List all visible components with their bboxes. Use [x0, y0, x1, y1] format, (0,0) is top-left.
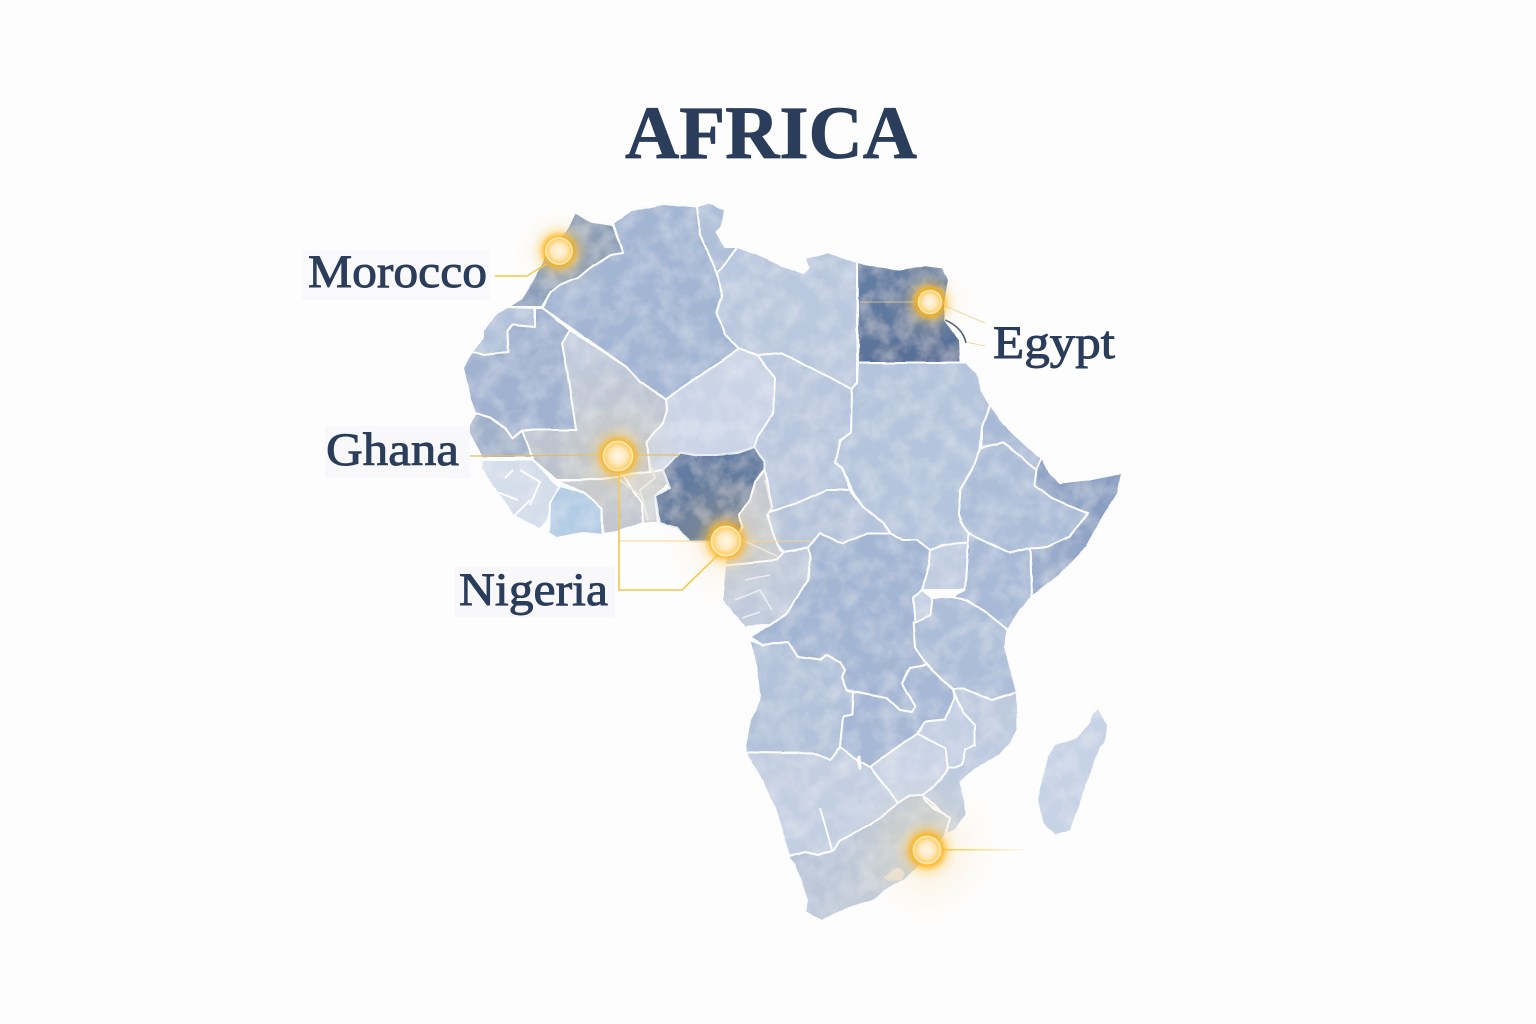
country: Guinea coast: [482, 460, 560, 530]
label: Ghana: Ghana: [326, 424, 459, 476]
label: Nigeria: Nigeria: [459, 564, 608, 616]
label: Morocco: Morocco: [308, 246, 487, 298]
line: South Africa: [942, 849, 1032, 851]
country: Libya: [717, 247, 857, 389]
marker: Nigeria: [658, 473, 794, 609]
line: Morocco: [495, 264, 546, 276]
country: Somalia: [1030, 458, 1122, 597]
country: Ivory Coast: [549, 486, 602, 538]
country: Zimbabwe: [870, 733, 948, 803]
line: Nigeria rays: [620, 540, 810, 542]
country: Angola: [745, 640, 853, 760]
label backgrounds: [302, 250, 615, 618]
country: Central African Republic: [767, 490, 890, 552]
country: Sudan: [835, 363, 990, 550]
country: Ghana: [557, 475, 643, 534]
country: Algeria: [542, 204, 739, 399]
country: Chad: [755, 353, 852, 513]
leader lines: [470, 264, 1032, 851]
line: Ghana: [470, 455, 680, 456]
label: Egypt: Egypt: [993, 317, 1115, 369]
country: Cameroon: [725, 470, 783, 565]
marker: Morocco: [511, 203, 607, 299]
country: Zambia: [840, 665, 955, 767]
lake Victoria: [933, 590, 965, 598]
Red Sea coast curve: [945, 320, 966, 343]
country: Egypt: [857, 262, 961, 363]
country: Uganda: [922, 543, 968, 590]
marker: Egypt: [884, 256, 976, 348]
country: Senegal: [467, 413, 533, 458]
country: Namibia and Botswana: [745, 747, 898, 857]
country: Mozambique: [922, 689, 1018, 835]
country: Morocco: [508, 213, 623, 307]
inner border lines: [497, 463, 941, 850]
country: Eritrea: [982, 405, 1050, 473]
country: Madagascar: [1038, 709, 1107, 835]
title: AFRICA: [625, 92, 917, 175]
country: Nigeria: [655, 447, 765, 553]
marker: South Africa: [847, 770, 1007, 930]
country: Mauritania: [463, 308, 576, 438]
country: Gabon and Congo: [722, 548, 810, 627]
line: Nigeria: [619, 470, 718, 590]
country: Ethiopia: [958, 443, 1088, 553]
country: Malawi: [917, 697, 975, 768]
country: Togo and Benin: [623, 470, 670, 523]
country: Lesotho: [884, 868, 905, 881]
country: DR Congo: [750, 533, 930, 712]
marker: Ghana: [556, 394, 680, 518]
map of Africa: [463, 202, 1122, 921]
country: Kenya: [952, 533, 1032, 630]
country: South Africa: [788, 795, 950, 921]
country: Niger: [647, 349, 775, 472]
country: Tanzania: [913, 597, 1017, 700]
country: Western Sahara: [472, 307, 535, 355]
country: Rwanda and Burundi: [913, 590, 932, 622]
line: Egypt rays: [860, 302, 985, 346]
country: Tunisia: [697, 202, 737, 274]
country: Mali: [512, 330, 667, 480]
